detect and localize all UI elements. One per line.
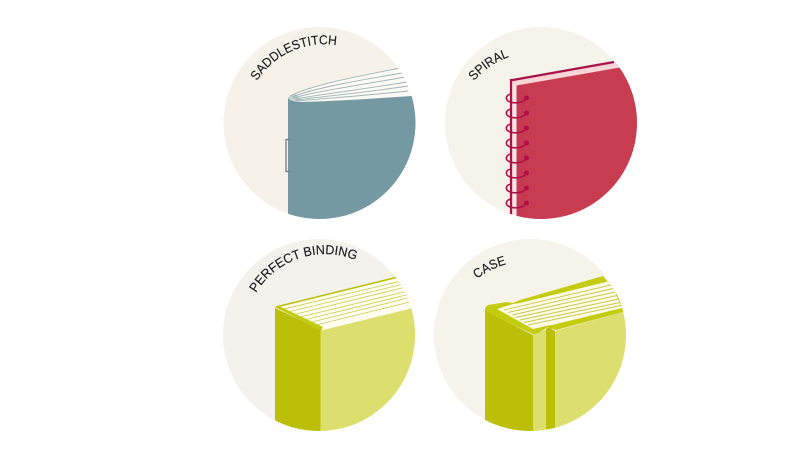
label: perfect binding: PERFECT BINDING: [249, 245, 357, 292]
label: spiral: SPIRAL: [468, 50, 509, 80]
icon: spiral notebook: [506, 62, 640, 225]
icon: saddlestitched booklet: [288, 68, 416, 219]
panel: case: [434, 239, 626, 431]
icon: perfect bound book: [275, 277, 425, 435]
circle background: spiral: [445, 27, 637, 219]
icon: staple: [286, 140, 289, 172]
circle background: perfect binding: [223, 239, 415, 431]
label: saddlestitch: SADDLESTITCH: [251, 35, 336, 80]
label: case: CASE: [474, 256, 506, 278]
circle background: case: [434, 239, 626, 431]
circle background: saddlestitch: [224, 27, 416, 219]
panel: saddlestitch: [224, 27, 416, 219]
icon: case bound book: [485, 276, 630, 435]
spiral coils: [506, 94, 526, 208]
panel: spiral: [445, 27, 637, 219]
panel: perfect binding: [223, 239, 415, 431]
